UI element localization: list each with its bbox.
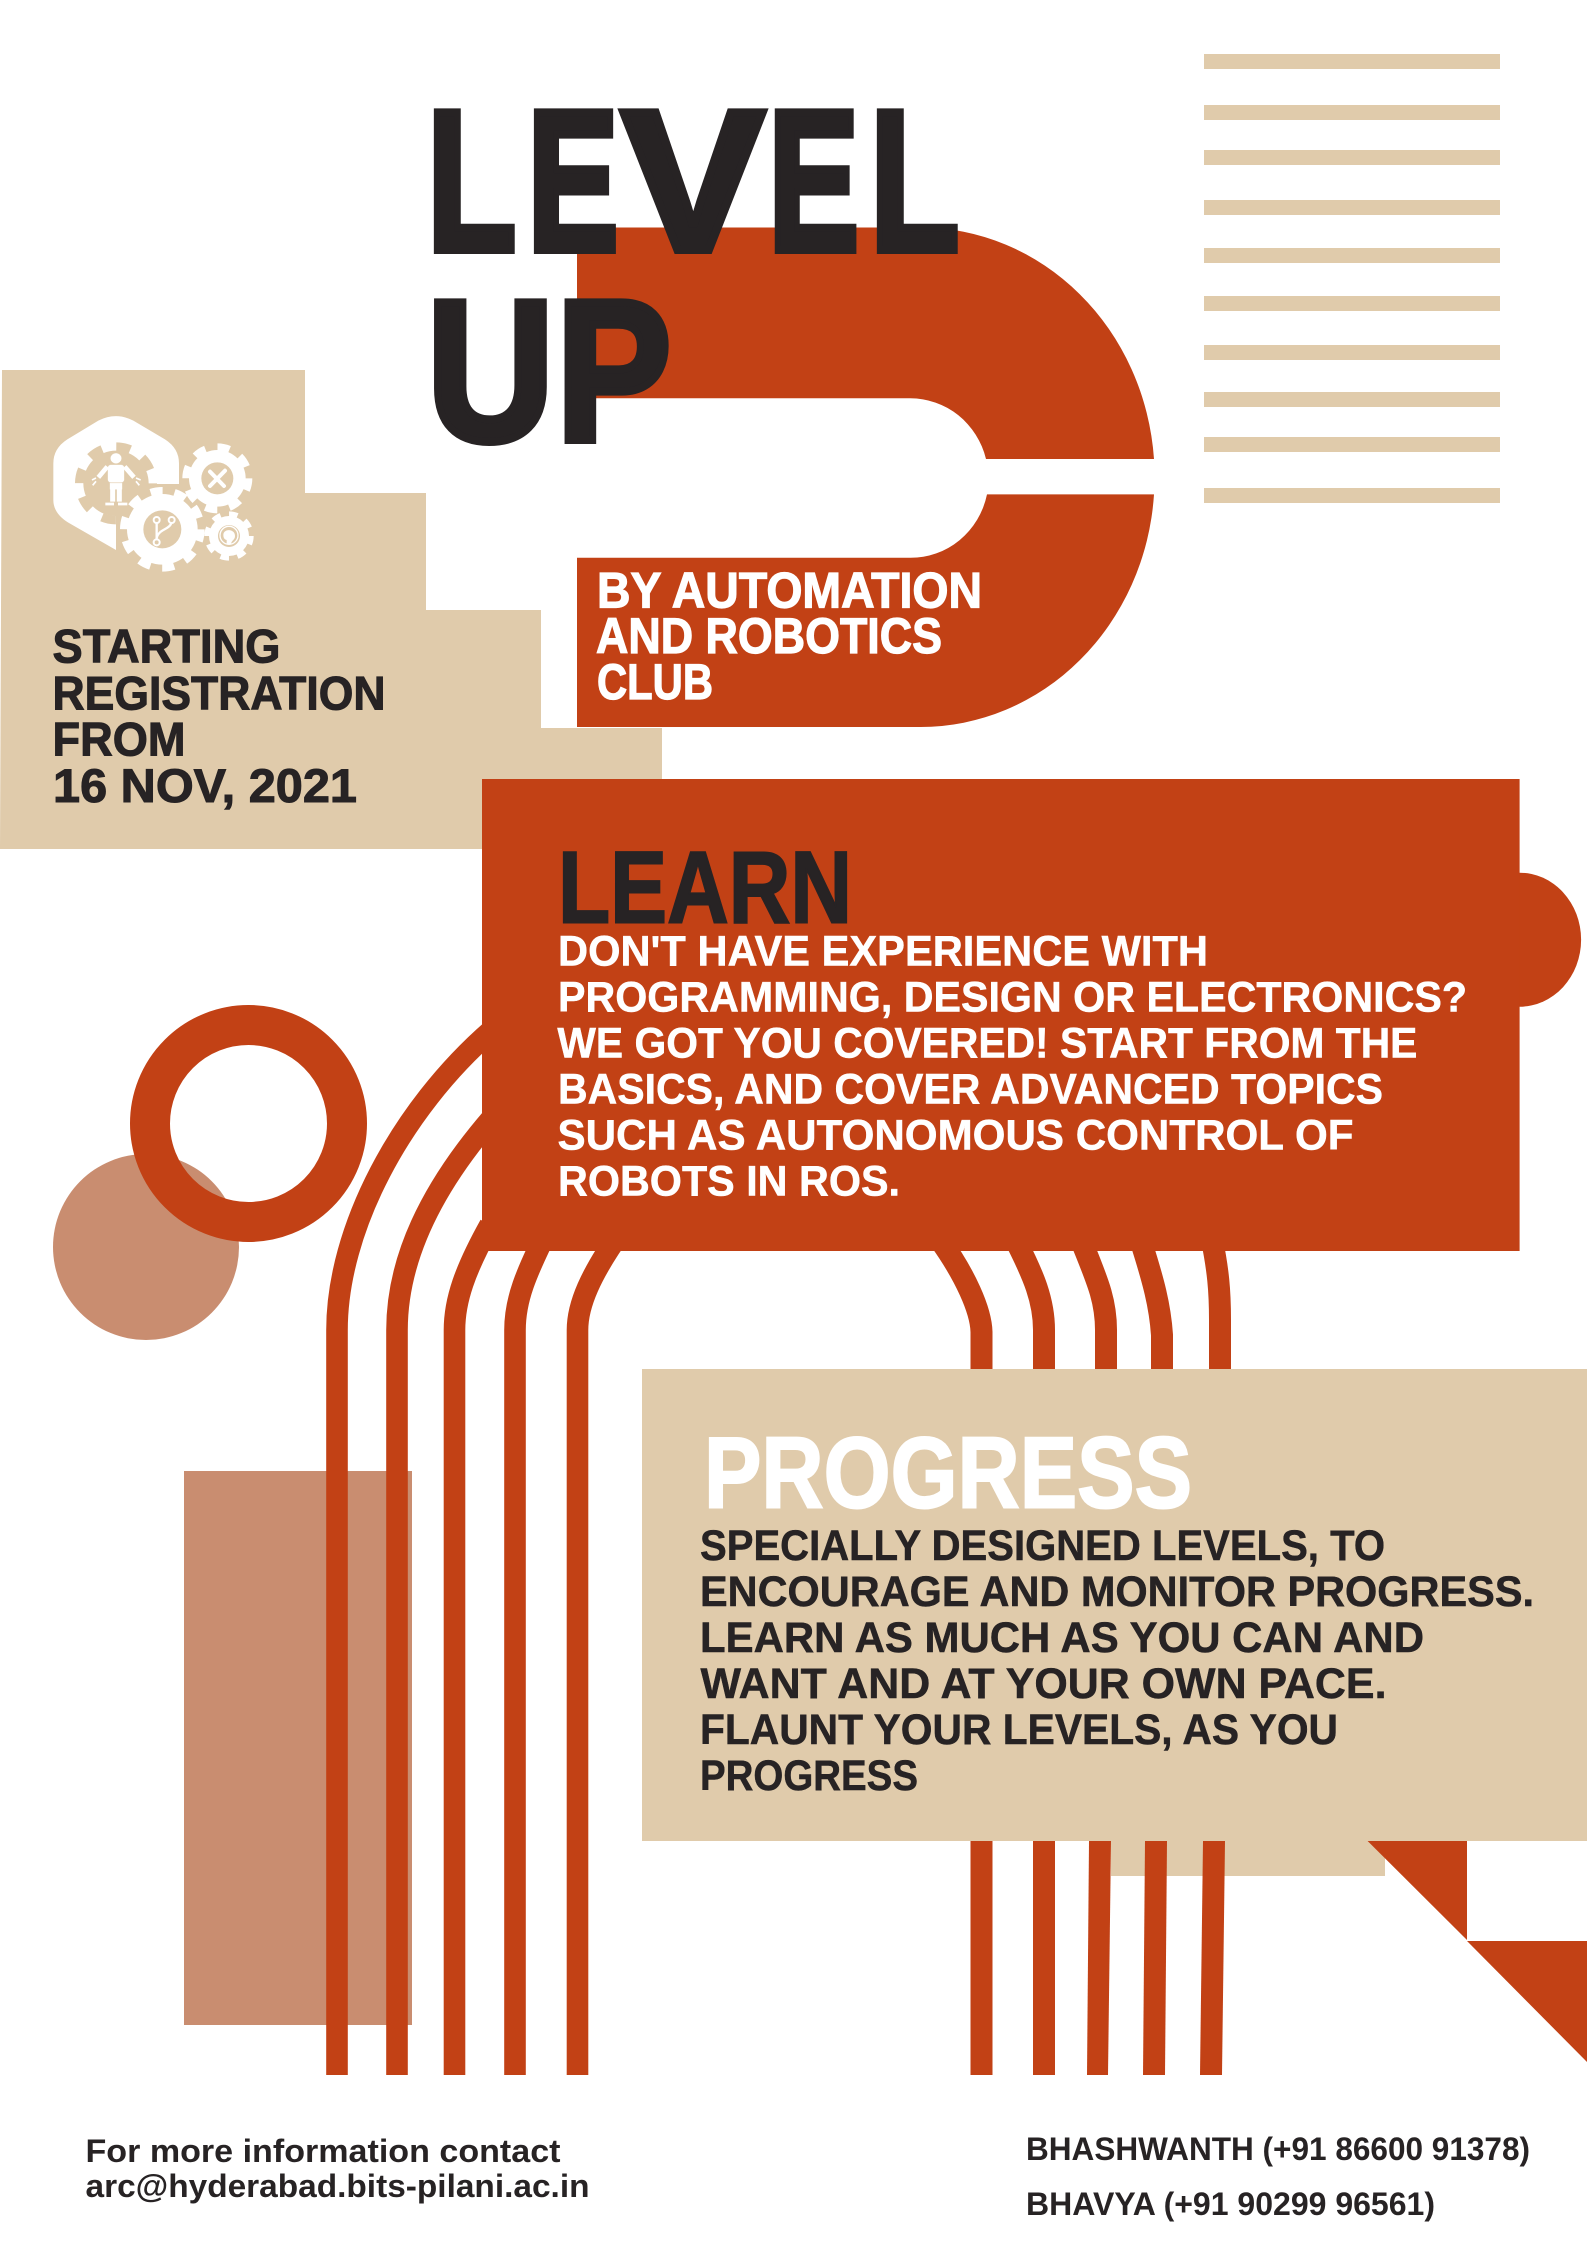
footer: email contact: For more information contact: [86, 2133, 561, 2169]
orange triangle upper: [1368, 1841, 1467, 1940]
decorative orange ring: [150, 1025, 347, 1222]
right group of curved lines: [940, 1240, 1220, 1372]
text: progress description: PROGRESS: [700, 1752, 918, 1800]
byline: by automation and robotics club: [596, 562, 982, 710]
text: progress description: [700, 1522, 1534, 1800]
title: LEVEL UP: E: [528, 70, 618, 293]
beige tab below progress panel: [1111, 1840, 1385, 1876]
footer: phone contacts: [1026, 2131, 1530, 2222]
title: LEVEL UP: P: [556, 260, 671, 483]
title: LEVEL UP: L: [870, 70, 959, 293]
title: LEVEL UP: [427, 70, 959, 483]
text: progress description: SPECIALLY DESIGNED LEVELS, TO: [700, 1522, 1385, 1570]
title: LEVEL UP: U: [427, 260, 554, 483]
text: learn description: BASICS, AND COVER ADVANCED TOPICS: [558, 1066, 1383, 1114]
panel: learn: [482, 779, 1581, 1251]
text: starting registration date: STARTING: [52, 620, 280, 672]
lower right group of lines: [970, 1841, 1225, 2075]
byline: by automation and robotics club: CLUB: [597, 654, 713, 710]
text: progress description: WANT AND AT YOUR OWN PACE.: [700, 1660, 1386, 1708]
left group of curved lines: [337, 1030, 622, 2075]
panel: progress: [642, 1369, 1587, 1841]
text: starting registration date: REGISTRATION: [52, 666, 386, 720]
text: starting registration date: FROM: [52, 712, 186, 766]
title: LEVEL UP: E: [768, 70, 859, 293]
text: learn description: DON'T HAVE EXPERIENCE WITH: [558, 928, 1208, 976]
footer: phone contacts: BHASHWANTH (+91 86600 91378): [1026, 2131, 1530, 2167]
text: progress description: LEARN AS MUCH AS YOU CAN AND: [700, 1614, 1424, 1662]
text: learn description: ROBOTS IN ROS.: [558, 1158, 900, 1206]
title: LEVEL UP: V: [622, 70, 764, 293]
footer: email contact: [86, 2133, 590, 2204]
rounded orange D shape: [577, 227, 1154, 727]
text: learn description: PROGRAMMING, DESIGN OR ELECTRONICS?: [558, 974, 1467, 1022]
stripes panel: [1204, 54, 1500, 503]
decorative pale circle: [53, 1154, 239, 1340]
footer: email contact: arc@hyderabad.bits-pilani.ac.in: [86, 2168, 590, 2204]
text: progress description: ENCOURAGE AND MONITOR PROGRESS.: [700, 1568, 1534, 1616]
text: learn description: SUCH AS AUTONOMOUS CONTROL OF: [558, 1112, 1354, 1160]
byline: by automation and robotics club: BY AUTOMATION: [597, 562, 982, 618]
title: LEVEL UP: L: [427, 70, 516, 293]
text: starting registration date: [52, 620, 386, 812]
decorative pale rectangle: [184, 1471, 412, 2025]
text: starting registration date: 16 NOV, 2021: [53, 759, 357, 812]
icon: club logo with gears: [53, 416, 251, 567]
heading: LEARN: LEARN: [558, 830, 852, 944]
panel: stepped registration background: [0, 370, 662, 849]
heading: PROGRESS: PROGRESS: [704, 1418, 1192, 1530]
byline: by automation and robotics club: AND ROBOTICS: [596, 608, 942, 664]
footer: phone contacts: BHAVYA (+91 90299 96561): [1026, 2186, 1435, 2222]
text: learn description: WE GOT YOU COVERED! START FROM THE: [557, 1020, 1417, 1068]
text: progress description: FLAUNT YOUR LEVELS, AS YOU: [700, 1706, 1338, 1754]
text: learn description: [557, 928, 1467, 1206]
orange triangle lower: [1467, 1941, 1587, 2062]
